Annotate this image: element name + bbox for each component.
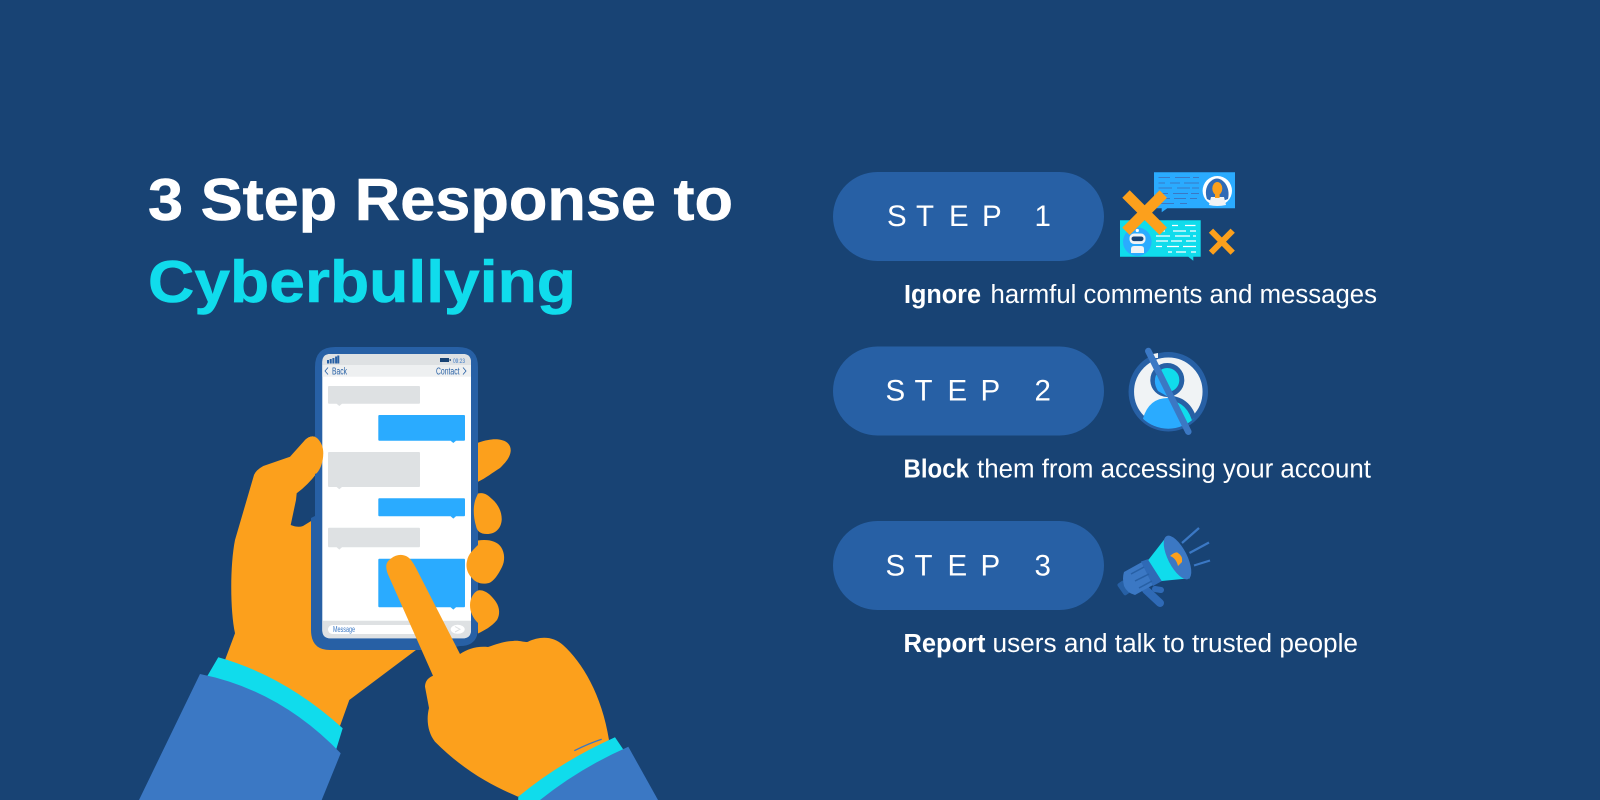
back label [325,367,348,378]
step 3 pill: STEP 3 [886,550,1051,582]
chat bubble with woman avatar [1154,172,1235,212]
phone screen [322,354,471,638]
right cuff [518,737,625,800]
message input field [328,625,428,634]
step 2 pill [833,346,1104,436]
crease on right wrist [574,739,602,751]
send button [451,625,465,634]
step 3 pill [833,521,1104,610]
phone [311,347,478,650]
right sleeve [540,747,658,800]
incoming message 3 [328,528,420,550]
step 1 pill: STEP 1 [887,200,1051,233]
message input bar [322,621,471,638]
left hand palm [222,436,418,726]
contact label: Contact [436,367,460,378]
navigation bar [322,365,471,377]
title line 1: 3 Step Response to [148,167,733,233]
finger 4 [470,590,499,634]
step 3 description: users and talk to trusted people [992,630,1358,658]
title line 2: cyberbullying: Cyberbullying [148,249,576,315]
step 2 pill: STEP 2 [886,375,1051,408]
step 2 description: them from accessing your account [977,456,1371,484]
icon: ignored chat messages [1120,172,1235,261]
back label: Back [332,367,348,378]
status bar [322,354,471,365]
outgoing message 3 [378,559,465,610]
right hand pointing [386,555,609,797]
outgoing message 1 [378,415,465,443]
battery icon [440,358,451,362]
step 2 description: Block [904,456,970,484]
step 3 [833,521,1358,658]
outgoing message 2 [378,498,465,519]
icon: blocked profile [1131,351,1205,434]
chat bubble with robot avatar [1120,220,1201,261]
finger 2 [474,493,502,534]
title [148,167,733,315]
step 2 [833,346,1371,484]
incoming message 1 [328,386,420,406]
time: 09:23 [453,358,465,365]
step 1 pill [833,172,1104,261]
icon: megaphone [1117,528,1210,603]
step 1 [833,172,1377,309]
large orange cross [1126,194,1163,231]
finger 3 [467,540,504,584]
finger 1 [478,439,511,482]
left sleeve [139,674,341,800]
step 1 description: harmful comments and messages [990,281,1377,309]
left cuff [205,657,343,750]
step 3 description: Report [904,630,986,658]
illustration: hands holding phone [139,347,658,800]
left thumb [300,436,323,480]
signal bars icon [327,356,339,364]
incoming message 2 [328,452,420,489]
step 1 description: Ignore [904,281,981,309]
small orange cross [1211,231,1233,253]
message placeholder: Message [333,625,355,634]
phone body [311,347,478,650]
